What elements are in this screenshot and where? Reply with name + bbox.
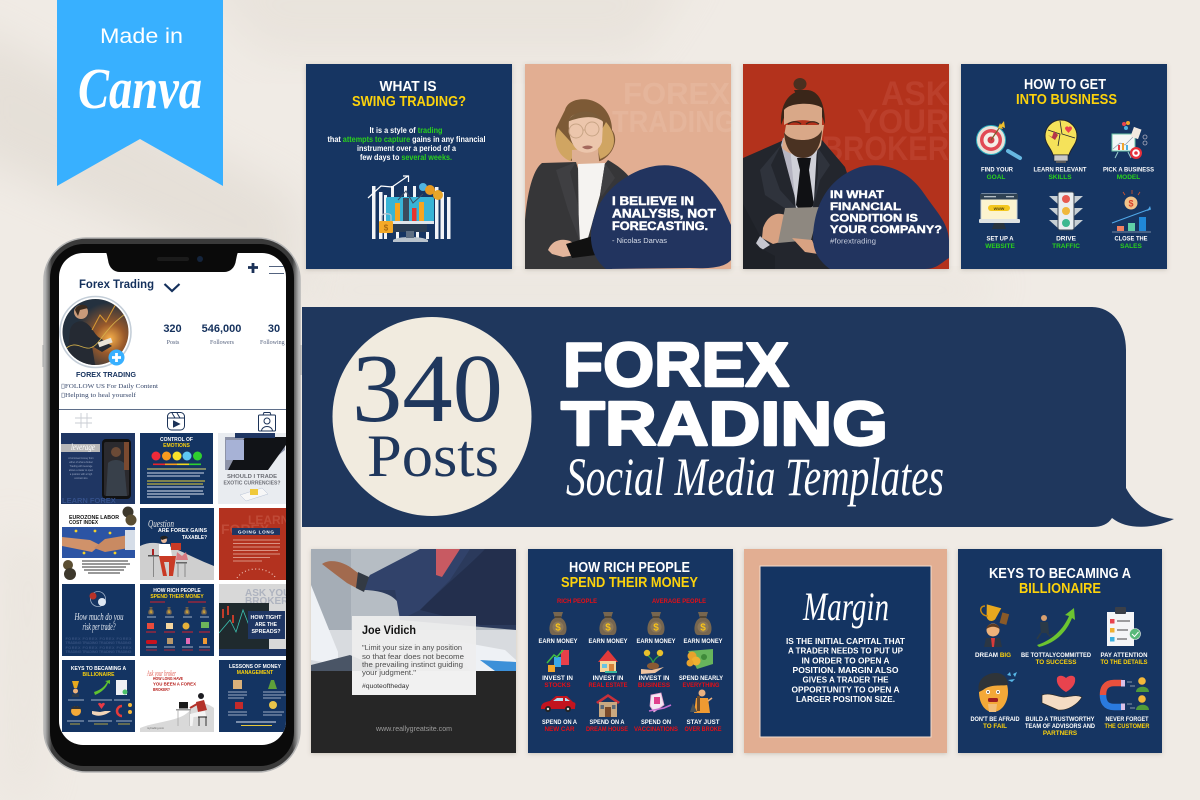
hashtag: #quoteoftheday <box>362 683 410 690</box>
avatar <box>60 296 131 370</box>
labels: BE TOTTALYCOMMITTED <box>1021 652 1091 659</box>
plus icon <box>248 263 258 273</box>
quote text: FORECASTING. <box>612 221 708 233</box>
thumbnail 8: How rich people spend: SPEND THEIR MONEY <box>150 594 204 600</box>
labels: EARN MONEY <box>684 638 723 645</box>
quote text: your judgment." <box>362 668 416 677</box>
quote text: YOUR COMPANY? <box>830 224 942 236</box>
thumbnail 3: Should I trade exotic currencies: EXOTIC CURRENCIES? <box>224 480 280 486</box>
heading <box>1016 77 1117 108</box>
badge: 340 posts: Posts <box>367 423 499 489</box>
blob <box>813 165 949 269</box>
column headings: AVERAGE PEOPLE <box>652 598 707 605</box>
icon: trading chart: $ <box>384 224 389 232</box>
body text: instrument over a period of a <box>357 143 456 153</box>
thumbnail 7: How much do you risk: risk per trade? <box>82 622 116 633</box>
icon labels: SKILLS <box>1048 174 1072 181</box>
labels: THE CUSTOMER <box>1104 723 1150 730</box>
thumbnail 1: Leverage: Trading with leverage <box>70 465 93 468</box>
thumbnail 9: Ask your broker: ASK YOUR <box>245 588 298 599</box>
ribbon text: Canva: Canva <box>78 56 202 121</box>
icon: broke student <box>690 690 712 713</box>
thumbnail 3: Should I trade exotic currencies <box>218 432 286 504</box>
heading: KEYS TO BECAMING A <box>989 566 1131 582</box>
thumbnail 11: How long have you been a forex broker <box>140 670 214 732</box>
thumbnail 12: Lessons of money management: MANAGEMENT <box>237 670 273 676</box>
watermark: ASK <box>881 75 949 113</box>
stats: 546,000 <box>202 323 241 335</box>
definition text <box>786 636 906 704</box>
quote text: so that fear does not become <box>362 652 464 661</box>
icon labels: LEARN RELEVANT <box>1034 166 1087 174</box>
thumbnail 9: Ask your broker: SPREADS? <box>252 629 281 635</box>
icon labels: CLOSE THE <box>1114 236 1148 242</box>
icons: money bags <box>549 612 712 635</box>
thumbnail 7: How much do you risk: FOREX FOREX FOREX FOREX <box>66 646 132 650</box>
heading: BILLIONAIRE <box>1019 581 1101 597</box>
labels: TO THE DETAILS <box>1100 659 1148 666</box>
thumbnail 11: How long have you been a forex broker: BROKER? <box>153 687 170 692</box>
post: Joe Vidich quote <box>311 549 516 753</box>
icon: trading chart <box>368 176 450 242</box>
heading: HOW RICH PEOPLE <box>569 560 690 576</box>
quote card <box>352 616 476 695</box>
icon: committed arrow <box>1037 608 1075 647</box>
icon: target <box>976 121 1020 158</box>
phone body <box>44 238 300 772</box>
icon: dream house <box>596 694 620 717</box>
post: Analysis quote <box>525 64 736 269</box>
icon: heart in hand <box>1042 676 1082 710</box>
heading: SPEND THEIR MONEY <box>561 575 698 591</box>
stats: Posts <box>167 340 180 346</box>
photo: businessman at desk <box>311 549 516 671</box>
thumbnail 11: How long have you been a forex broker: YOU BEEN A FOREX <box>153 682 196 686</box>
heading: INTO BUSINESS <box>1016 92 1117 108</box>
labels: VACCINATIONS <box>634 726 678 733</box>
thumbnail 6: Going long <box>219 508 289 580</box>
labels: REAL ESTATE <box>588 682 628 689</box>
thumbnail 9: Ask your broker: HOW TIGHT <box>250 615 282 621</box>
labels: EARN MONEY <box>588 638 628 645</box>
notch <box>106 253 238 272</box>
quote text: FINANCIAL <box>830 201 901 213</box>
labels: DREAM HOUSE <box>586 726 628 733</box>
thumbnail 1: Leverage: a position with a high <box>70 473 93 476</box>
thumbnail 5: Are forex gains taxable: TAXABLE? <box>182 535 207 541</box>
labels: INVEST IN <box>542 675 573 682</box>
thumbnail 9: Ask your broker <box>219 584 286 656</box>
icon: growth chart: $ <box>1128 198 1134 208</box>
watermark: TRADING <box>612 104 736 139</box>
inner panel <box>760 566 931 737</box>
photo: man <box>743 78 856 269</box>
photo: woman <box>525 99 630 269</box>
tab: grid icon <box>75 413 92 428</box>
heading: HOW TO GET <box>1024 77 1106 93</box>
labels: STAY JUST <box>686 719 720 726</box>
profile name: Forex Trading <box>79 279 154 291</box>
quote text <box>362 643 464 677</box>
icon labels: GOAL <box>987 174 1005 181</box>
thumbnail 7: How much do you risk: TRADING TRADING TRADING TRADING <box>66 641 132 645</box>
thumbnail 5: Are forex gains taxable <box>140 508 214 580</box>
icon: lightbulb <box>1045 120 1077 163</box>
labels: TO SUCCESS <box>1036 659 1076 666</box>
icon: traffic light <box>1049 192 1083 230</box>
labels: PAY ATTENTION <box>1100 652 1148 659</box>
definition text: A TRADER NEEDS TO PUT UP <box>788 646 903 656</box>
bio text: ▯Helping to heal yourself <box>61 392 137 399</box>
badge: 340 posts <box>332 317 532 516</box>
icon: car <box>541 696 576 712</box>
thumbnail 9: Ask your broker: ARE THE <box>255 622 277 628</box>
thumbnail 3: Should I trade exotic currencies: SHOULD I TRADE <box>227 474 278 480</box>
labels: STOCKS <box>544 682 571 689</box>
quote text <box>830 189 942 236</box>
thumbnail 2: Control of emotions: CONTROL OF <box>160 437 193 443</box>
labels: EVERYTHING <box>682 682 720 689</box>
watermark: BROKER <box>822 130 949 168</box>
thumbnail 5: Are forex gains taxable: Question <box>148 518 174 530</box>
profile handle: FOREX TRADING <box>76 370 136 379</box>
tab: tagged icon <box>258 412 276 431</box>
quote text: ANALYSIS, NOT <box>612 208 716 220</box>
thumbnail 6: Going long: LEARN <box>248 513 289 527</box>
icon: dream big <box>981 604 1009 647</box>
bio text: ▯FOLLOW US For Daily Content <box>61 383 158 390</box>
banner title <box>561 331 888 459</box>
icon labels: DRIVE <box>1056 236 1077 242</box>
labels: SPEND ON A <box>590 719 625 726</box>
definition text: IS THE INITIAL CAPITAL THAT <box>786 636 906 646</box>
body text: few days to several weeks. <box>360 152 452 162</box>
thumbnail 12: Lessons of money management: LESSONS OF MONEY <box>229 664 282 670</box>
thumbnail 10: Keys to becoming a billionaire: KEYS TO BECAMING A <box>71 666 127 672</box>
icon: clipboard <box>1107 607 1140 646</box>
chevron <box>164 284 180 291</box>
labels: DON'T BE AFRAID <box>970 716 1020 723</box>
thumbnail 1: Leverage: either of what a broker <box>69 461 93 464</box>
icon labels: WEBSITE <box>985 243 1015 250</box>
profile divider <box>59 409 286 410</box>
thumbnail 8: How rich people spend: HOW RICH PEOPLE <box>153 588 201 594</box>
icon labels: SET UP A <box>986 236 1014 242</box>
thumbnail 7: How much do you risk: TRADING TRADING TRADING TRADING <box>66 650 132 654</box>
badge: 340 posts: 340 <box>352 335 503 442</box>
quote text: the prevailing instinct guiding <box>362 660 463 669</box>
labels: DREAM BIG <box>975 652 1011 659</box>
labels: EARN MONEY <box>538 638 578 645</box>
thumbnail 6: Going long: GOING LONG <box>238 530 274 534</box>
thumbnail 7: How much do you risk <box>62 584 135 656</box>
post: How rich people spend their money <box>528 549 733 753</box>
thumbnail 10: Keys to becoming a billionaire: BILLIONAIRE <box>83 672 115 678</box>
stats <box>163 323 285 346</box>
post: What is swing trading <box>306 64 512 269</box>
thumbnail 1: Leverage: A borrowed money from <box>68 457 94 460</box>
blob <box>591 165 731 269</box>
quote text: IN WHAT <box>830 189 884 201</box>
icon labels: FIND YOUR <box>981 166 1013 174</box>
thumbnail 4: Eurozone labor cost index <box>62 506 136 580</box>
icon: vaccinations <box>649 693 671 712</box>
banner subtitle: Social Media Templates <box>566 447 944 507</box>
column headings <box>557 598 707 605</box>
watermark <box>824 82 948 160</box>
thumbnail 4: Eurozone labor cost index: EUROZONE LABOR <box>69 515 119 521</box>
website: www.reallygreatsite.com <box>375 724 452 733</box>
thumbnail 4: Eurozone labor cost index: COST INDEX <box>69 520 98 526</box>
labels: SPEND NEARLY <box>679 675 724 682</box>
thumbnail 6: Going long: FOREX <box>221 521 270 537</box>
quote text: I BELIEVE IN <box>612 196 694 208</box>
labels: TEAM OF ADVISORS AND <box>1025 723 1095 730</box>
definition text: POSITION. MARGIN ALSO <box>792 665 899 675</box>
thumbnail 12: Lessons of money management <box>219 660 286 732</box>
ribbon text: Made in: Made in <box>100 25 183 48</box>
thumbnail 7: How much do you risk: How much do you <box>74 612 124 623</box>
labels <box>538 638 724 733</box>
labels: BUSINESS <box>638 682 670 689</box>
definition text: OPPORTUNITY TO OPEN A <box>792 684 900 694</box>
definition text: IN ORDER TO OPEN A <box>802 655 890 665</box>
icon: magnet and customers <box>1103 677 1149 710</box>
icon: real estate <box>598 650 618 673</box>
bio text <box>61 383 158 399</box>
labels: NEVER FORGET <box>1106 716 1149 723</box>
quote author: Joe Vidich <box>362 625 416 637</box>
watermark: YOUR <box>857 103 949 141</box>
thumbnail 8: How rich people spend <box>140 584 214 656</box>
body text <box>328 125 486 162</box>
thumbnail 1: Leverage: LEARN FOREX <box>62 496 116 505</box>
thumbnail 9: Ask your broker: BROKER <box>245 596 289 607</box>
icon labels: MODEL <box>1117 174 1140 181</box>
stats: 320 <box>163 323 182 335</box>
heading <box>561 560 698 591</box>
tab: reels icon <box>168 412 184 430</box>
post: Margin <box>744 549 947 753</box>
thumbnail 5: Are forex gains taxable: ARE FOREX GAINS <box>158 528 207 534</box>
definition text: GIVES A TRADER THE <box>802 675 889 685</box>
heading: WHAT IS <box>380 79 437 95</box>
phone screen <box>59 250 298 745</box>
heading <box>352 79 466 110</box>
labels: SPEND ON <box>641 719 671 726</box>
column headings: RICH PEOPLE <box>557 598 598 605</box>
thumbnail 1: Leverage: allows a trader to open <box>69 469 94 472</box>
icon: website monitor <box>979 194 1020 229</box>
labels: SPEND ON A <box>542 719 577 726</box>
stats: 30 <box>268 323 280 335</box>
thumbnail 1: Leverage <box>61 433 135 505</box>
icon: business model <box>1112 121 1147 159</box>
labels: NEW CAR <box>544 726 575 733</box>
post: How to get into business <box>961 64 1167 269</box>
banner title: TRADING <box>561 390 888 459</box>
hashtag: #forextrading <box>830 236 876 246</box>
quote text: "Limit your size in any position <box>362 643 462 652</box>
heading: SWING TRADING? <box>352 94 466 110</box>
thumbnail 7: How much do you risk: FOREX FOREX FOREX FOREX <box>66 637 132 641</box>
icon labels: PICK A BUSINESS <box>1103 166 1155 174</box>
stats: Following <box>260 340 285 346</box>
banner <box>302 307 1174 527</box>
icon: website monitor: www <box>993 206 1005 211</box>
thumbnail 11: How long have you been a forex broker: Ask your broker <box>146 669 176 678</box>
icon labels <box>981 166 1155 250</box>
body text: It is a style of trading <box>370 125 442 135</box>
watermark <box>612 83 731 132</box>
labels: INVEST IN <box>639 675 670 682</box>
labels <box>970 652 1150 737</box>
attribution: - Nicolas Darvas <box>612 238 668 245</box>
post: Keys to becoming a billionaire <box>958 549 1162 753</box>
ribbon: Made in Canva <box>57 0 223 186</box>
banner title: FOREX <box>563 331 789 400</box>
body text: that attempts to capture gains in any financial <box>328 134 486 144</box>
heading <box>989 566 1131 597</box>
thumbnail 2: Control of emotions: EMOTIONS <box>163 443 190 449</box>
quote text <box>612 196 716 233</box>
labels: EARN MONEY <box>636 638 676 645</box>
thumbnail 11: How long have you been a forex broker: HOW LONG HAVE <box>153 676 183 681</box>
labels: OVER BROKE <box>684 726 722 733</box>
icon: worried face <box>979 672 1017 712</box>
thumbnail 1: Leverage: leverage <box>71 442 95 452</box>
labels: TO FAIL <box>983 723 1007 730</box>
phone mockup <box>42 238 302 772</box>
icon labels: TRAFFIC <box>1052 243 1080 250</box>
definition text: LARGER POSITION SIZE. <box>796 694 895 704</box>
icon: business plant <box>641 650 664 674</box>
menu icon <box>269 266 284 274</box>
thumbnail 10: Keys to becoming a billionaire <box>62 660 135 732</box>
stats: Followers <box>210 340 235 346</box>
icon: stocks <box>547 650 569 672</box>
icon: growth chart <box>1112 190 1151 232</box>
thumbnail 1: Leverage: contract size <box>74 477 88 480</box>
thumbnail 11: How long have you been a forex broker: mytrading.com <box>147 726 164 730</box>
watermark: FOREX <box>623 76 730 111</box>
labels: BUILD A TRUSTWORTHY <box>1026 716 1095 723</box>
thumbnail 2: Control of emotions <box>140 433 213 504</box>
icon labels: SALES <box>1120 243 1142 250</box>
quote text: CONDITION IS <box>830 212 918 224</box>
labels: PARTNERS <box>1043 730 1077 737</box>
script heading: Margin <box>802 584 889 629</box>
icon: cash <box>686 649 713 669</box>
labels: INVEST IN <box>593 675 624 682</box>
post: Ask your broker <box>743 64 949 269</box>
